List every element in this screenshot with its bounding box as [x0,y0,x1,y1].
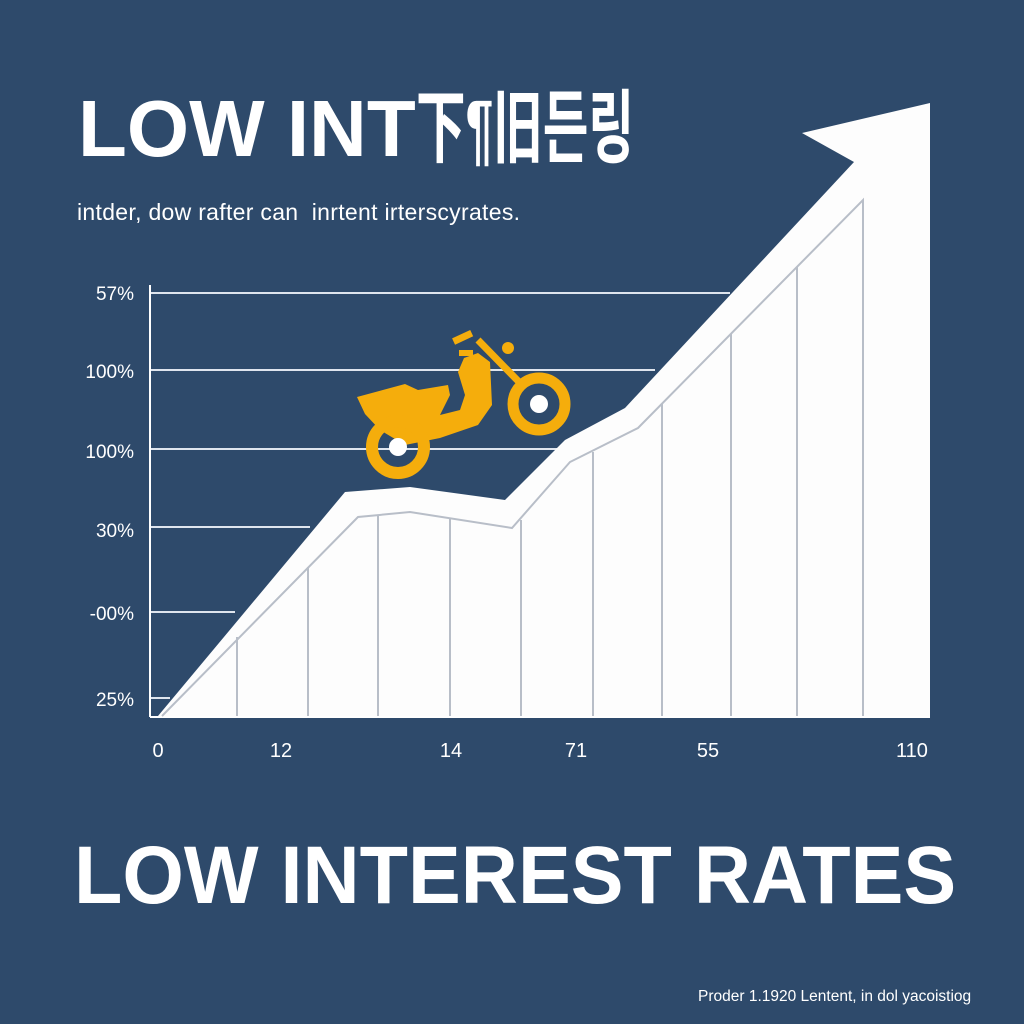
y-axis labels: 30% [96,521,134,542]
y-axis labels: -00% [90,604,134,625]
footer note: Proder 1.1920 Lentent, in dol yacoistiog [698,988,971,1005]
heading: low interest rates: LOW INTEREST RATES [74,830,956,921]
x-axis labels: 110 [896,740,928,762]
y-axis labels: 100% [85,362,134,383]
title: 下¶旧든링 [416,84,634,173]
icon: scooter [357,330,565,473]
x-axis labels [152,740,928,762]
y-axis labels: 57% [96,284,134,305]
x-axis labels: 55 [697,740,719,762]
title [78,84,634,173]
x-axis labels: 12 [270,740,292,762]
x-axis labels: 14 [440,740,462,762]
x-axis labels: 71 [565,740,587,762]
y-axis labels: 25% [96,690,134,711]
axes [150,285,930,717]
y-axis labels [85,284,134,711]
gridlines [150,293,730,698]
x-axis labels: 0 [152,740,164,762]
y-axis labels: 100% [85,442,134,463]
rising arrow area [158,103,930,716]
subtitle: intder, dow rafter can inrtent irterscyrates. [77,199,520,225]
title: LOW INT [78,84,416,173]
